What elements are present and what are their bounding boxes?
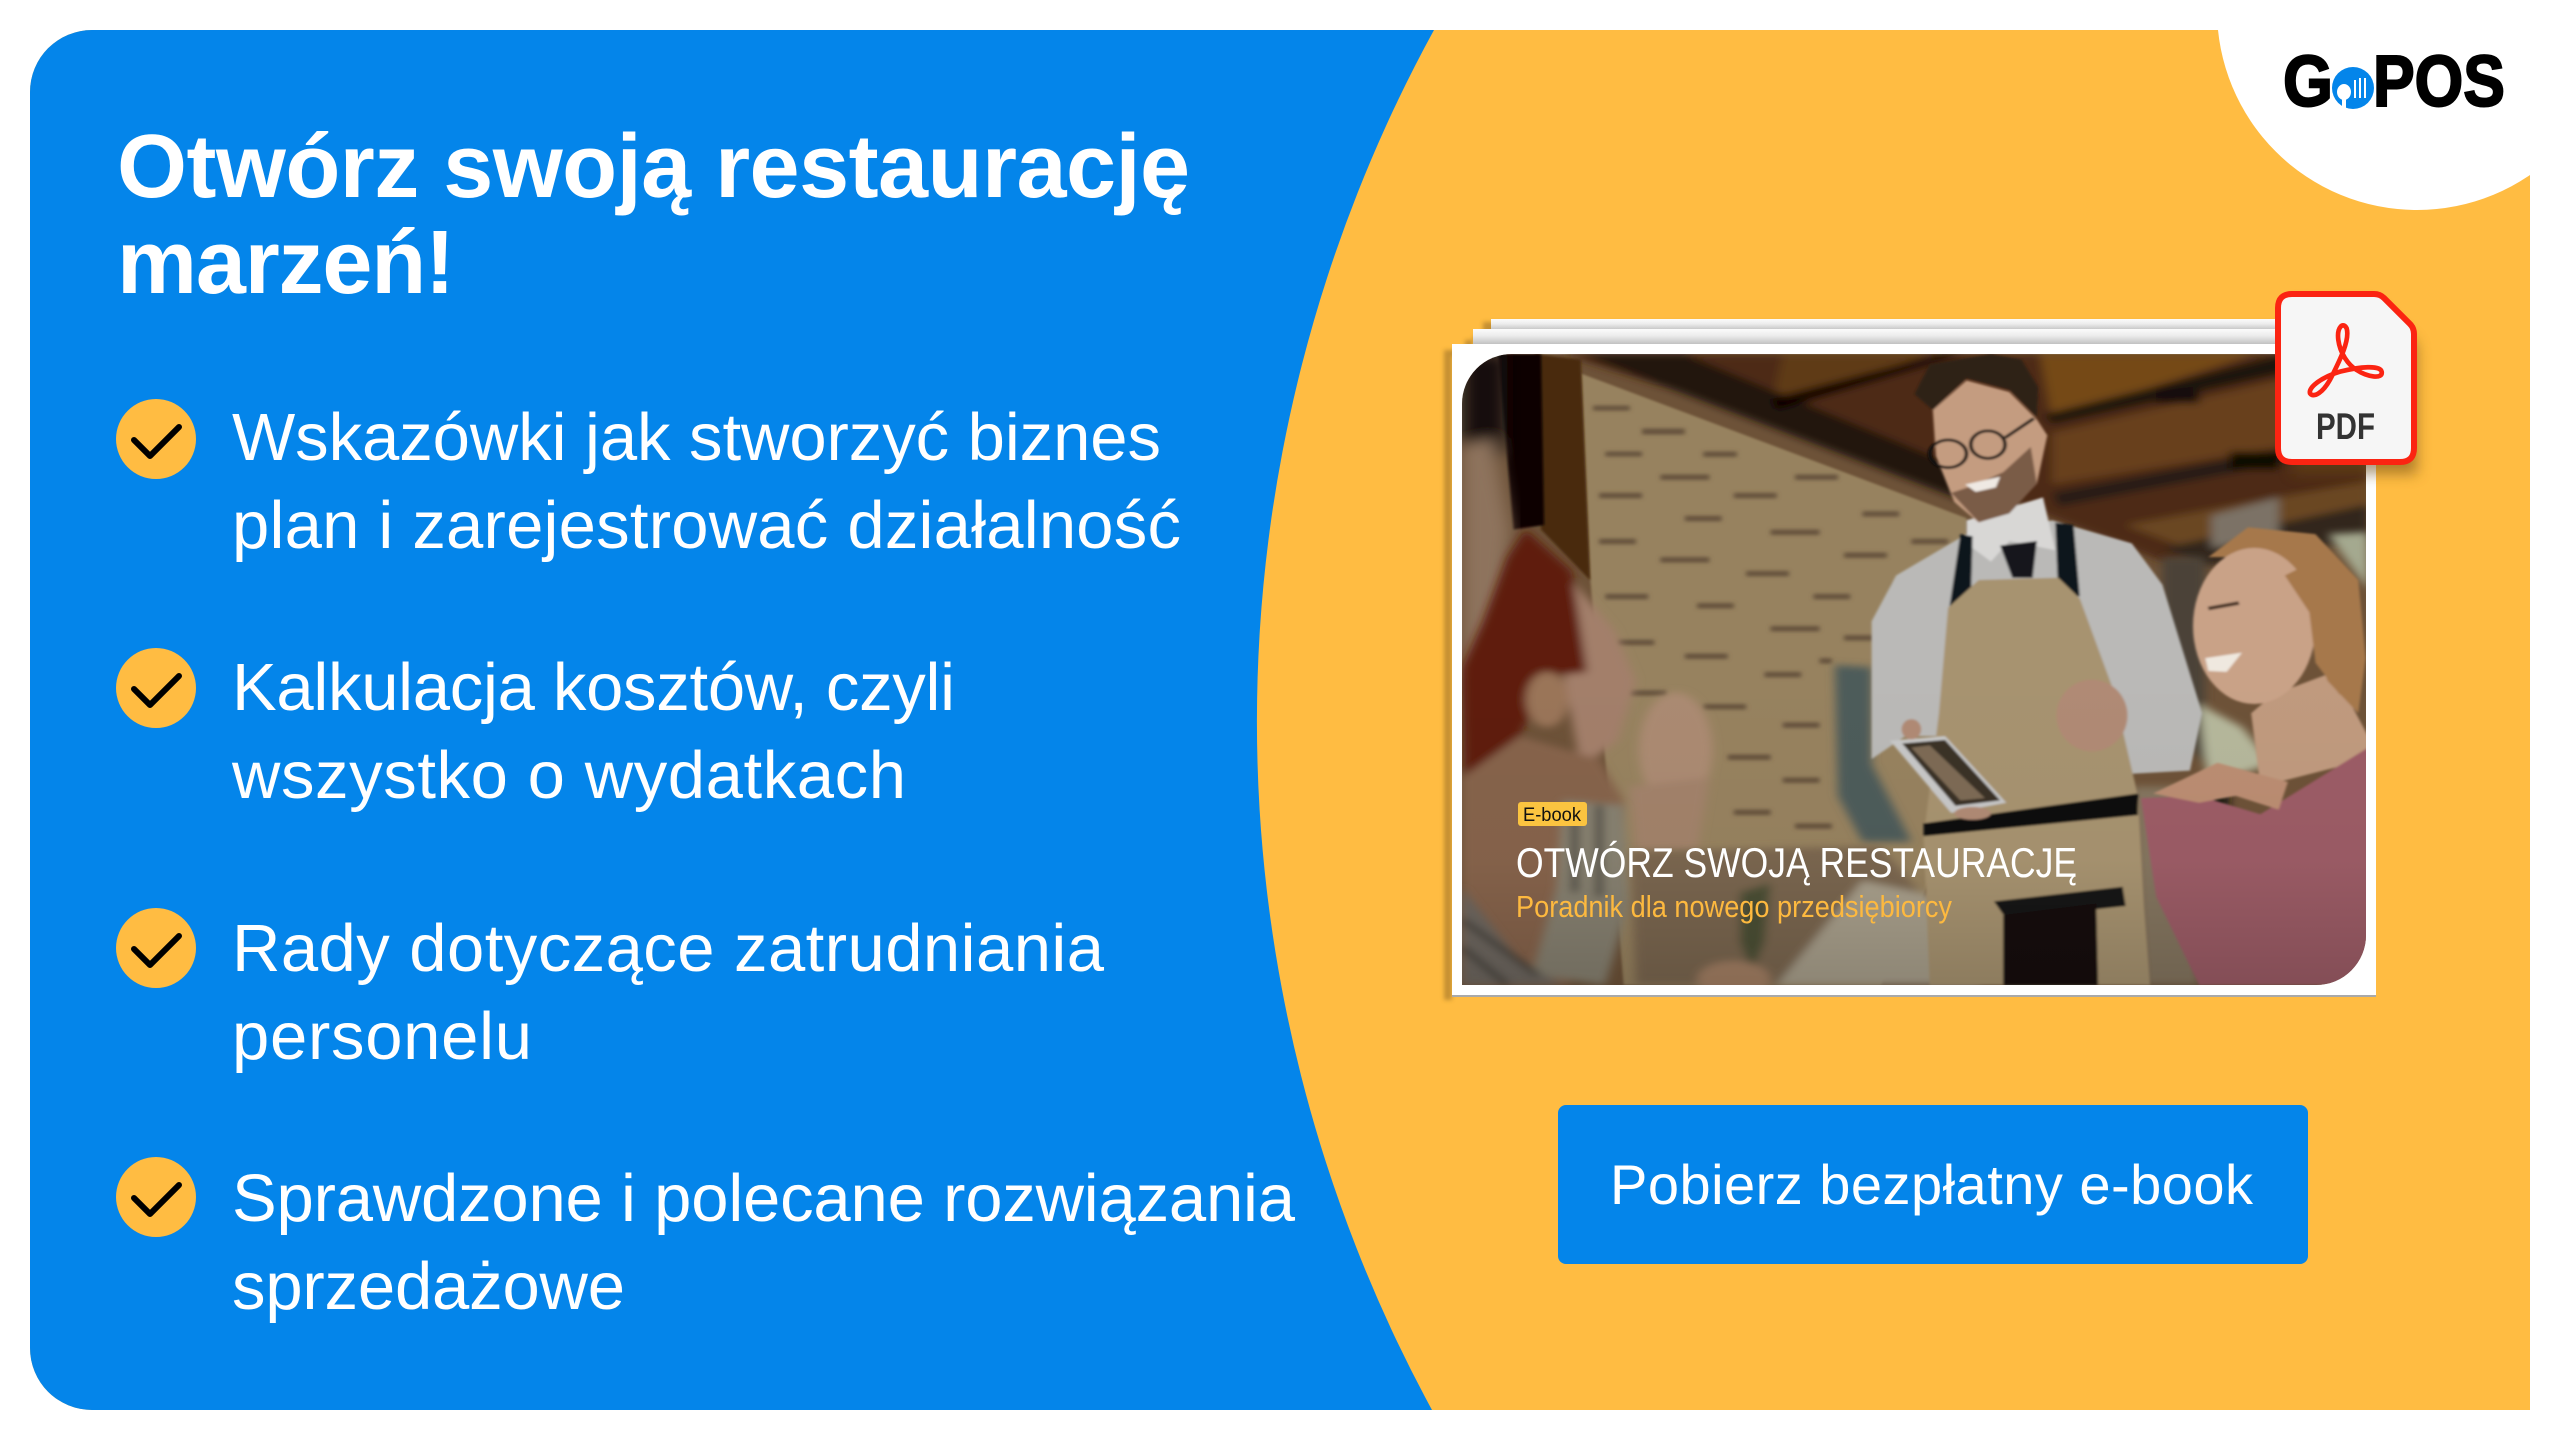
background right — [2132, 532, 2368, 985]
cover tag: E-book: E-book — [1523, 805, 1581, 826]
cover photo: restaurant scene — [1462, 354, 2368, 998]
logo: GoPOS: POS — [2373, 42, 2505, 122]
icon: PDF file: PDF — [2316, 406, 2375, 447]
list item 1 — [116, 399, 1181, 563]
logo backdrop circle — [2218, 30, 2530, 210]
waiter — [1872, 354, 2202, 985]
cover page — [1452, 344, 2376, 996]
title — [117, 117, 1190, 313]
smiling woman — [2141, 527, 2368, 985]
wall picture — [1835, 665, 1911, 842]
e-book cover stack — [1444, 319, 2376, 1000]
logo: GoPOS: G — [2283, 42, 2333, 122]
list item 2: Kalkulacja kosztów, czyli — [232, 650, 955, 725]
list item 1: plan i zarejestrować działalność — [232, 488, 1181, 563]
striped shirt — [1462, 800, 1630, 985]
stack shadow — [1444, 322, 2290, 1000]
icon: PDF file — [2278, 294, 2417, 474]
back sheet 1 — [1473, 329, 2293, 344]
list item 3 — [116, 908, 1105, 1074]
bottom darkening — [1462, 888, 2366, 985]
wall bricks — [1593, 406, 1948, 829]
brick wall — [1581, 373, 1966, 985]
wooden pillar — [1535, 354, 1590, 580]
panel: blue left side — [30, 30, 1434, 1410]
back sheet 2 — [1491, 319, 2291, 330]
list item 2: wszystko o wydatkach — [231, 738, 906, 813]
cover subtitle: Poradnik dla nowego przedsiębiorcy — [1516, 889, 1952, 924]
ceiling — [1562, 354, 2368, 566]
list item 4 — [116, 1157, 1296, 1324]
title: Otwórz swoją restaurację — [117, 117, 1190, 217]
title: marzeń! — [117, 213, 455, 313]
red-haired woman — [1462, 530, 1712, 985]
list item 3: personelu — [232, 999, 532, 1074]
button: download e-book — [1558, 1105, 2308, 1264]
cover title: OTWÓRZ SWOJĄ RESTAURACJĘ — [1516, 839, 2077, 886]
button: download e-book: Pobierz bezpłatny e-book — [1610, 1153, 2254, 1216]
left foreground person — [1462, 354, 1510, 676]
table, menu and plant — [1628, 845, 1979, 985]
list item 3: Rady dotyczące zatrudniania — [232, 911, 1105, 986]
logo: GoPOS — [2283, 42, 2505, 122]
list item 2 — [116, 648, 955, 813]
list item 4: Sprawdzone i polecane rozwiązania — [232, 1161, 1296, 1236]
list item 1: Wskazówki jak stworzyć biznes — [232, 400, 1161, 475]
list item 4: sprzedażowe — [232, 1249, 625, 1324]
